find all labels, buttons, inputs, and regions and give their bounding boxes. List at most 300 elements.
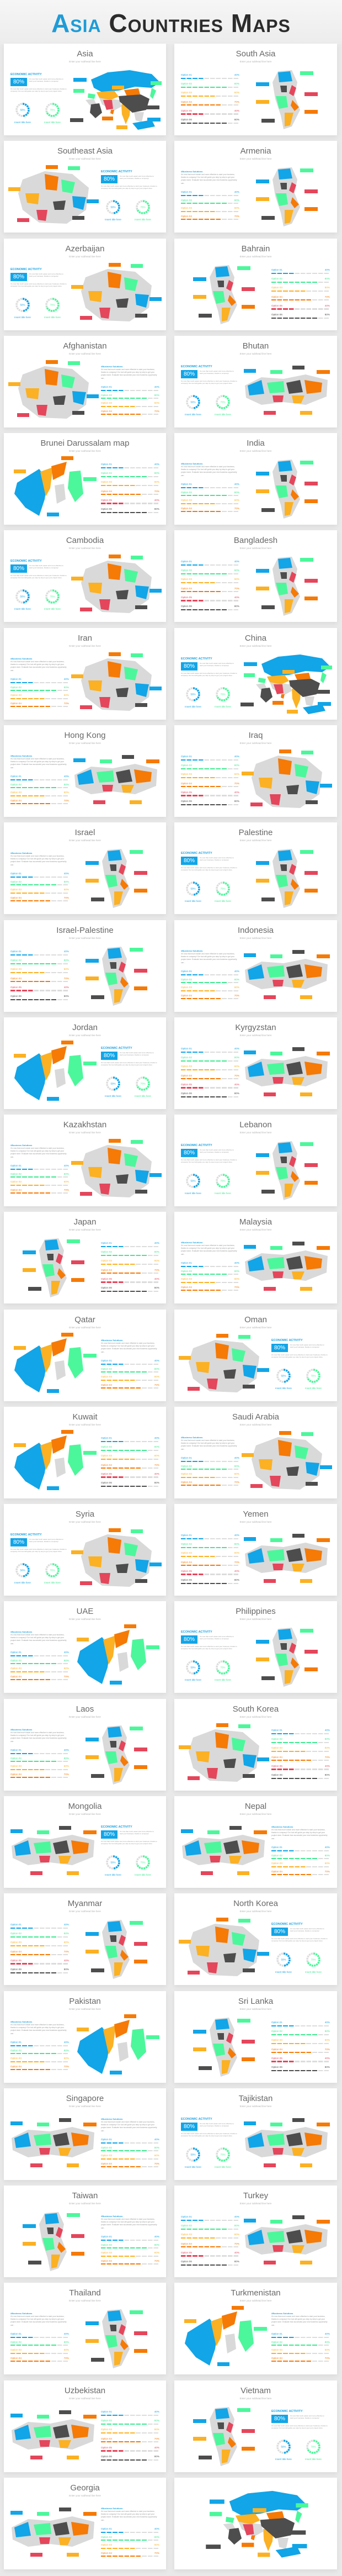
panel: business solutions: #Business Solutions (101, 365, 122, 368)
panel: options: 80% (325, 2066, 330, 2068)
donut 50%: 50% (20, 595, 25, 598)
panel: business solutions (181, 1239, 241, 1297)
panel: options: 80% (64, 959, 69, 962)
map (69, 942, 163, 1009)
map (177, 2013, 270, 2079)
card: Thailand (4, 2283, 166, 2374)
panel: options: Option 03 (271, 286, 282, 289)
panel: economic activity (101, 1824, 161, 1881)
panel: business solutions: It's now that much easier and more effective to start your business, thanks to company! Our tool will guide you step by step to get your project done. Evaluate how successful your new business opportunity can . (101, 1342, 157, 1353)
title: South Asia (236, 49, 275, 59)
donut 70% (215, 881, 231, 896)
card: Sri Lanka (174, 1991, 337, 2083)
panel: business solutions: 80% (64, 2049, 69, 2051)
donut 50% (276, 1368, 291, 1384)
title: Vietnam (241, 2386, 271, 2395)
panel: options: Option 02 (181, 569, 192, 572)
panel: business solutions: Option 03 (10, 888, 22, 891)
panel: options: 70% (64, 977, 69, 980)
card: Kazakhstan (4, 1115, 166, 1206)
panel: business solutions: 40% (234, 970, 239, 973)
panel: economic activity: It's now that much easier and more effective to start your business, thanks to company! (290, 1344, 324, 1348)
panel: options: 40% (325, 2057, 330, 2060)
heading: ECONOMIC ACTIVITY (101, 1047, 132, 1050)
panel: business solutions: 40% (64, 1164, 69, 1167)
heading: ECONOMIC ACTIVITY (181, 852, 212, 855)
stat box 80% (181, 1635, 197, 1644)
panel: business solutions: Option 01 (10, 1749, 22, 1751)
panel: options: Option 05 (181, 1570, 192, 1572)
panel: options: Option 06 (181, 1579, 192, 1581)
title: Israel-Palestine (56, 926, 114, 935)
heading: ECONOMIC ACTIVITY (10, 1533, 42, 1537)
panel: options: Option 05 (271, 1765, 282, 1767)
subhead: Enter your subhead line here (69, 1423, 101, 1426)
panel: economic activity: It's now that much easier and more effective to start your business, thanks to company! Our tool will guide you step by step to get your project done. (10, 574, 67, 579)
stat box 80% (271, 2415, 288, 2423)
panel: business solutions: 80% (64, 1172, 69, 1175)
panel: business solutions: 70% (234, 1286, 239, 1288)
panel: business solutions: Option 01 (101, 2235, 112, 2238)
subhead: Enter your subhead line here (240, 2299, 271, 2302)
panel: business solutions: 70% (234, 507, 239, 509)
panel: economic activity: It's now that much easier and more effective to start your business, thanks to company! Our tool will guide you step by step to get your project done. (181, 2132, 237, 2137)
title: Indonesia (238, 926, 274, 935)
panel: business solutions: 60% (64, 1667, 69, 1670)
panel: business solutions: It's now that much easier and more effective to start your business, thanks to company! Our tool will guide you step by step to get your project done. Evaluate how successful your new business opportunity can . (181, 1439, 237, 1450)
panel: economic activity: Insert title here (305, 1971, 322, 1973)
panel: options: Option 03 (181, 773, 192, 775)
panel: business solutions: Option 01 (10, 2041, 22, 2044)
donut 50%: 50% (110, 205, 116, 209)
header background (0, 0, 342, 44)
donut 50%: 50% (190, 1666, 196, 1669)
panel: business solutions: Option 04 (271, 1870, 282, 1872)
panel: economic activity: It's now that much easier and more effective to start your business, thanks to company! (200, 857, 234, 861)
panel: economic activity (10, 559, 67, 610)
donut 70% (135, 1076, 151, 1091)
panel: business solutions: #Business Solutions (181, 170, 202, 173)
panel: business solutions: 70% (154, 2552, 159, 2554)
panel: business solutions: Option 03 (181, 1472, 192, 1475)
title: Kazakhstan (63, 1120, 106, 1129)
panel: options: 80% (325, 1773, 330, 1776)
panel: business solutions: It's now that much easier and more effective to start your business, thanks to company! Our tool will guide you step by step to get your project done. Evaluate how successful your new business opportunity can . (271, 1829, 328, 1840)
panel: options: 60% (325, 286, 330, 289)
card: Afghanistan (4, 336, 166, 427)
panel: economic activity: Insert title here (305, 1387, 322, 1390)
panel: options: 60% (325, 2039, 330, 2041)
title: Southeast Asia (57, 146, 113, 156)
donut 70% (45, 589, 60, 604)
panel: business solutions: Option 02 (10, 1659, 22, 1661)
panel: economic activity: Insert title here (185, 1192, 201, 1195)
title: Asia (77, 49, 93, 59)
stat box 80% (101, 175, 117, 183)
panel: options (101, 2408, 161, 2466)
donut 50%: 50% (190, 887, 196, 890)
map (8, 165, 99, 224)
map (6, 2403, 100, 2469)
subhead: Enter your subhead line here (69, 645, 101, 647)
panel: options: Option 06 (181, 2260, 192, 2263)
panel: business solutions: #Business Solutions (10, 1728, 32, 1731)
panel: business solutions: 80% (234, 978, 239, 981)
panel: options (181, 753, 241, 810)
panel: options: 70% (325, 1756, 330, 1759)
panel: options: Option 01 (271, 2021, 282, 2024)
panel: economic activity: Insert title here (14, 1581, 31, 1584)
title: Kyrgyzstan (235, 1023, 276, 1032)
donut 50% (185, 881, 201, 896)
card: Indonesia (174, 920, 337, 1012)
stat box 80% (271, 1344, 288, 1352)
panel: business solutions: 80% (64, 686, 69, 688)
panel: business solutions: 70% (325, 1870, 330, 1872)
map (6, 1332, 100, 1398)
panel: business solutions: Option 03 (10, 1180, 22, 1183)
panel: business solutions (101, 2213, 161, 2271)
panel: options: 60% (154, 481, 159, 483)
panel: business solutions (10, 1629, 70, 1686)
panel: economic activity (181, 365, 237, 416)
panel: options: Option 02 (101, 1250, 112, 1253)
panel: options: 80% (64, 995, 69, 997)
panel: economic activity: It's now that much easier and more effective to start your business, thanks to company! Our tool will guide you step by step to get your project done. (10, 88, 67, 92)
panel: business solutions: Option 02 (10, 880, 22, 883)
panel: business solutions: 60% (154, 1375, 159, 1378)
panel: options: 60% (154, 2428, 159, 2431)
subhead: Enter your subhead line here (69, 60, 101, 63)
panel: economic activity: Insert title here (44, 316, 61, 319)
panel: options: Option 01 (181, 560, 192, 563)
panel: options: Option 03 (271, 2039, 282, 2041)
panel: options (181, 560, 239, 610)
panel: options: Option 05 (181, 791, 192, 794)
panel: economic activity: It's now that much easier and more effective to start your business, thanks to company! (120, 175, 154, 180)
title: Uzbekistan (65, 2386, 105, 2395)
donut 50%: 50% (20, 108, 25, 112)
title: South Korea (233, 1704, 279, 1714)
map (239, 1429, 333, 1495)
panel: business solutions: Option 01 (10, 1164, 22, 1167)
title: Palestine (239, 828, 272, 837)
panel: business solutions: 80% (154, 2146, 159, 2149)
panel: options: 80% (64, 1932, 69, 1935)
stat box 80%: 80% (274, 1929, 285, 1935)
card: UAE (4, 1601, 166, 1693)
stat box 80%: 80% (184, 2124, 195, 2130)
subhead: Enter your subhead line here (240, 1131, 271, 1134)
panel: options: Option 03 (181, 2233, 192, 2236)
panel: business solutions: 70% (154, 2259, 159, 2262)
map (69, 1526, 163, 1592)
title: Bhutan (243, 341, 269, 351)
panel: business solutions: 40% (154, 2235, 159, 2238)
panel: options: 40% (325, 304, 330, 307)
stat box 80% (10, 78, 27, 86)
subhead: Enter your subhead line here (240, 1034, 271, 1037)
panel: business solutions: Option 04 (101, 2259, 112, 2262)
panel: options: 60% (234, 773, 239, 775)
panel: business solutions: It's now that much easier and more effective to start your business, thanks to company! Our tool will guide you step by step to get your project done. Evaluate how successful your new business opportunity can . (10, 1147, 67, 1158)
panel: options: 70% (234, 101, 239, 103)
panel: business solutions: 60% (234, 986, 239, 989)
map (69, 1915, 163, 1982)
map (177, 1721, 270, 1787)
stat box 80% (181, 857, 197, 865)
panel: options: Option 02 (181, 1056, 192, 1059)
panel: options: 40% (154, 1437, 159, 1439)
panel: options (10, 948, 70, 1005)
panel: business solutions: Option 04 (10, 799, 22, 802)
panel: options: 70% (325, 2048, 330, 2051)
map (71, 555, 162, 613)
panel: business solutions: #Business Solutions (10, 657, 32, 660)
card: Israel (4, 822, 166, 914)
title: China (245, 634, 266, 643)
map (8, 360, 99, 419)
panel: options: Option 03 (181, 91, 192, 94)
stat box 80%: 80% (274, 1345, 285, 1351)
panel: options: 60% (234, 1551, 239, 1554)
subhead: Enter your subhead line here (240, 1910, 271, 1913)
map (70, 70, 162, 130)
panel: business solutions: Option 03 (10, 1667, 22, 1670)
title: Kuwait (72, 1412, 98, 1422)
panel: business solutions: It's now that much easier and more effective to start your business, thanks to company! Our tool will guide you step by step to get your project done. Evaluate how successful your new business opportunity can . (101, 2218, 157, 2229)
panel: options: Option 04 (271, 2048, 282, 2051)
panel: business solutions: 70% (154, 1383, 159, 1386)
panel: options: 80% (154, 1481, 159, 1484)
panel: business solutions: 80% (64, 783, 69, 785)
donut 70% (45, 1563, 60, 1578)
subhead: Enter your subhead line here (240, 450, 271, 452)
card: Kuwait (4, 1407, 166, 1498)
panel: options: 40% (154, 1278, 159, 1280)
title: Yemen (243, 1509, 269, 1519)
panel: options: Option 03 (181, 1551, 192, 1554)
panel: options: 40% (325, 268, 330, 271)
card: Armenia (174, 141, 337, 233)
panel: options: Option 03 (10, 1941, 22, 1944)
panel: business solutions (101, 365, 159, 415)
panel: business solutions: 70% (64, 2356, 69, 2359)
donut 70%: 70% (311, 1959, 316, 1961)
card: South Korea (174, 1699, 337, 1791)
panel: business solutions: Option 01 (181, 970, 192, 973)
panel: options: Option 03 (271, 1746, 282, 1749)
panel: economic activity: Insert title here (215, 705, 231, 708)
panel: options: 70% (234, 1561, 239, 1564)
panel: options: 40% (234, 73, 239, 76)
card: China (174, 628, 337, 720)
stat box 80% (181, 662, 197, 671)
subhead: Enter your subhead line here (69, 2202, 101, 2205)
panel: business solutions: 70% (64, 1773, 69, 1775)
panel: options: Option 01 (101, 1437, 112, 1439)
subhead: Enter your subhead line here (240, 1423, 271, 1426)
map (239, 747, 333, 814)
donut 70% (306, 1952, 321, 1967)
panel: business solutions: Option 02 (181, 1269, 192, 1273)
donut 70%: 70% (50, 595, 55, 598)
panel: options: 80% (325, 313, 330, 316)
panel: business solutions: 40% (234, 1261, 239, 1264)
panel: options: Option 06 (10, 1968, 22, 1971)
panel: options: Option 03 (181, 1065, 192, 1068)
heading: ECONOMIC ACTIVITY (181, 2118, 212, 2121)
panel: business solutions: Option 03 (101, 1375, 112, 1378)
panel: business solutions: It's now that much easier and more effective to start your business, thanks to company! Our tool will guide you step by step to get your project done. Evaluate how successful your new business opportunity can . (181, 173, 237, 184)
card: Laos (4, 1699, 166, 1791)
donut 70% (136, 200, 150, 214)
stat box 80%: 80% (104, 176, 115, 182)
panel: economic activity: Insert title here (185, 1678, 201, 1681)
heading: ECONOMIC ACTIVITY (181, 365, 212, 368)
heading: ECONOMIC ACTIVITY (101, 170, 132, 173)
panel: business solutions: 80% (64, 2341, 69, 2343)
donut 70% (45, 103, 60, 117)
panel: business solutions: Option 03 (181, 986, 192, 989)
panel: business solutions: 60% (64, 694, 69, 696)
map (6, 2500, 100, 2566)
subhead: Enter your subhead line here (69, 2299, 101, 2302)
panel: business solutions: 80% (234, 1269, 239, 1273)
panel: business solutions: Option 02 (181, 199, 192, 201)
panel: options: Option 02 (271, 1738, 282, 1740)
panel: options: Option 06 (181, 605, 192, 608)
panel: options: Option 04 (181, 1074, 192, 1077)
panel: business solutions: 70% (64, 701, 69, 705)
donut 70% (216, 395, 230, 409)
panel: business solutions: Option 02 (101, 1368, 112, 1370)
panel: business solutions: 70% (325, 2356, 330, 2359)
subhead: Enter your subhead line here (240, 2105, 271, 2108)
panel: options: Option 02 (10, 959, 22, 962)
donut 50% (185, 2147, 201, 2162)
panel: options: 80% (234, 605, 239, 608)
title: UAE (77, 1607, 93, 1616)
panel: business solutions: 80% (154, 393, 159, 397)
panel: options: Option 06 (181, 118, 192, 121)
panel: business solutions: 40% (64, 872, 69, 875)
panel: options: 60% (234, 2233, 239, 2236)
panel: options: Option 01 (10, 1923, 22, 1926)
panel: options: Option 03 (101, 2428, 112, 2431)
donut 70%: 70% (50, 108, 55, 112)
panel: business solutions: #Business Solutions (181, 949, 202, 952)
donut 50%: 50% (190, 693, 196, 696)
panel: options: 70% (154, 2437, 159, 2440)
card: Cambodia (4, 530, 166, 622)
panel: options: Option 05 (271, 2057, 282, 2060)
title: Bangladesh (234, 536, 277, 545)
panel: business solutions: 60% (325, 1862, 330, 1865)
panel: options: 80% (154, 1286, 159, 1289)
panel: options: 60% (234, 1065, 239, 1068)
panel: options: 70% (154, 490, 159, 493)
subhead: Enter your subhead line here (240, 1715, 271, 1718)
panel: business solutions: Option 02 (181, 1465, 192, 1467)
panel: options: Option 04 (181, 2242, 192, 2245)
panel: business solutions: Option 04 (10, 1773, 22, 1775)
panel: economic activity: Insert title here (275, 1971, 292, 1973)
panel: economic activity: Insert title here (135, 218, 151, 221)
panel: business solutions: #Business Solutions (10, 1144, 32, 1147)
panel: options (101, 1239, 161, 1297)
donut 50% (15, 298, 30, 312)
panel: options: 70% (234, 587, 239, 590)
panel: options: 80% (234, 1056, 239, 1059)
panel: business solutions: Option 01 (101, 386, 112, 388)
panel: business solutions: 40% (325, 1846, 330, 1849)
panel: business solutions (10, 657, 69, 707)
panel: options: 60% (154, 1454, 159, 1457)
card: Lebanon (174, 1115, 337, 1206)
panel: options: 70% (154, 1464, 159, 1466)
panel: business solutions: Option 02 (10, 2049, 22, 2051)
panel: options: Option 04 (101, 2437, 112, 2440)
panel: business solutions: 80% (154, 2244, 159, 2246)
panel: options: Option 05 (181, 1083, 192, 1086)
panel: economic activity: Insert title here (105, 1873, 121, 1876)
panel: business solutions: Option 01 (101, 1359, 112, 1362)
panel: economic activity: Insert title here (275, 2458, 292, 2461)
donut 50%: 50% (190, 2153, 196, 2156)
title: Georgia (70, 2483, 100, 2493)
map (239, 2110, 333, 2177)
panel: options: Option 01 (10, 950, 22, 953)
subhead: Enter your subhead line here (69, 1910, 101, 1913)
panel: options: 70% (234, 782, 239, 785)
map (6, 2110, 100, 2177)
panel: options: 70% (234, 2242, 239, 2245)
panel: business solutions: Option 01 (101, 2138, 112, 2141)
panel: economic activity: It's now that much easier and more effective to start your business, thanks to company! Our tool will guide you step by step to get your project done. (271, 1354, 328, 1358)
panel: business solutions: Option 04 (101, 410, 112, 412)
panel: business solutions: #Business Solutions (10, 852, 32, 854)
panel: business solutions (10, 850, 70, 907)
panel: options: Option 02 (101, 1445, 112, 1448)
panel: business solutions: #Business Solutions (181, 462, 202, 465)
panel: options: Option 06 (181, 1092, 192, 1095)
panel: options: 40% (154, 2446, 159, 2449)
donut 50% (15, 103, 30, 117)
panel: business solutions: 70% (234, 1480, 239, 1484)
donut 70% (45, 298, 60, 312)
subhead: Enter your subhead line here (69, 255, 101, 258)
panel: options: 40% (234, 791, 239, 794)
subhead: Enter your subhead line here (240, 2202, 271, 2205)
panel: business solutions: 80% (234, 199, 239, 201)
map (69, 747, 163, 814)
donut 50% (276, 2439, 291, 2454)
card: Oman (174, 1310, 337, 1401)
map (256, 167, 318, 226)
donut 70%: 70% (140, 205, 146, 209)
card: Qatar (4, 1310, 166, 1401)
panel: options: Option 01 (101, 1242, 112, 1244)
subhead: Enter your subhead line here (240, 2397, 271, 2400)
panel: options: Option 04 (10, 977, 22, 980)
panel: business solutions: 60% (154, 2154, 159, 2157)
panel: business solutions: Option 03 (10, 2348, 22, 2351)
panel: business solutions (10, 753, 70, 810)
panel: options: Option 02 (271, 277, 282, 280)
panel: options: 40% (234, 109, 239, 112)
subhead: Enter your subhead line here (240, 60, 271, 63)
